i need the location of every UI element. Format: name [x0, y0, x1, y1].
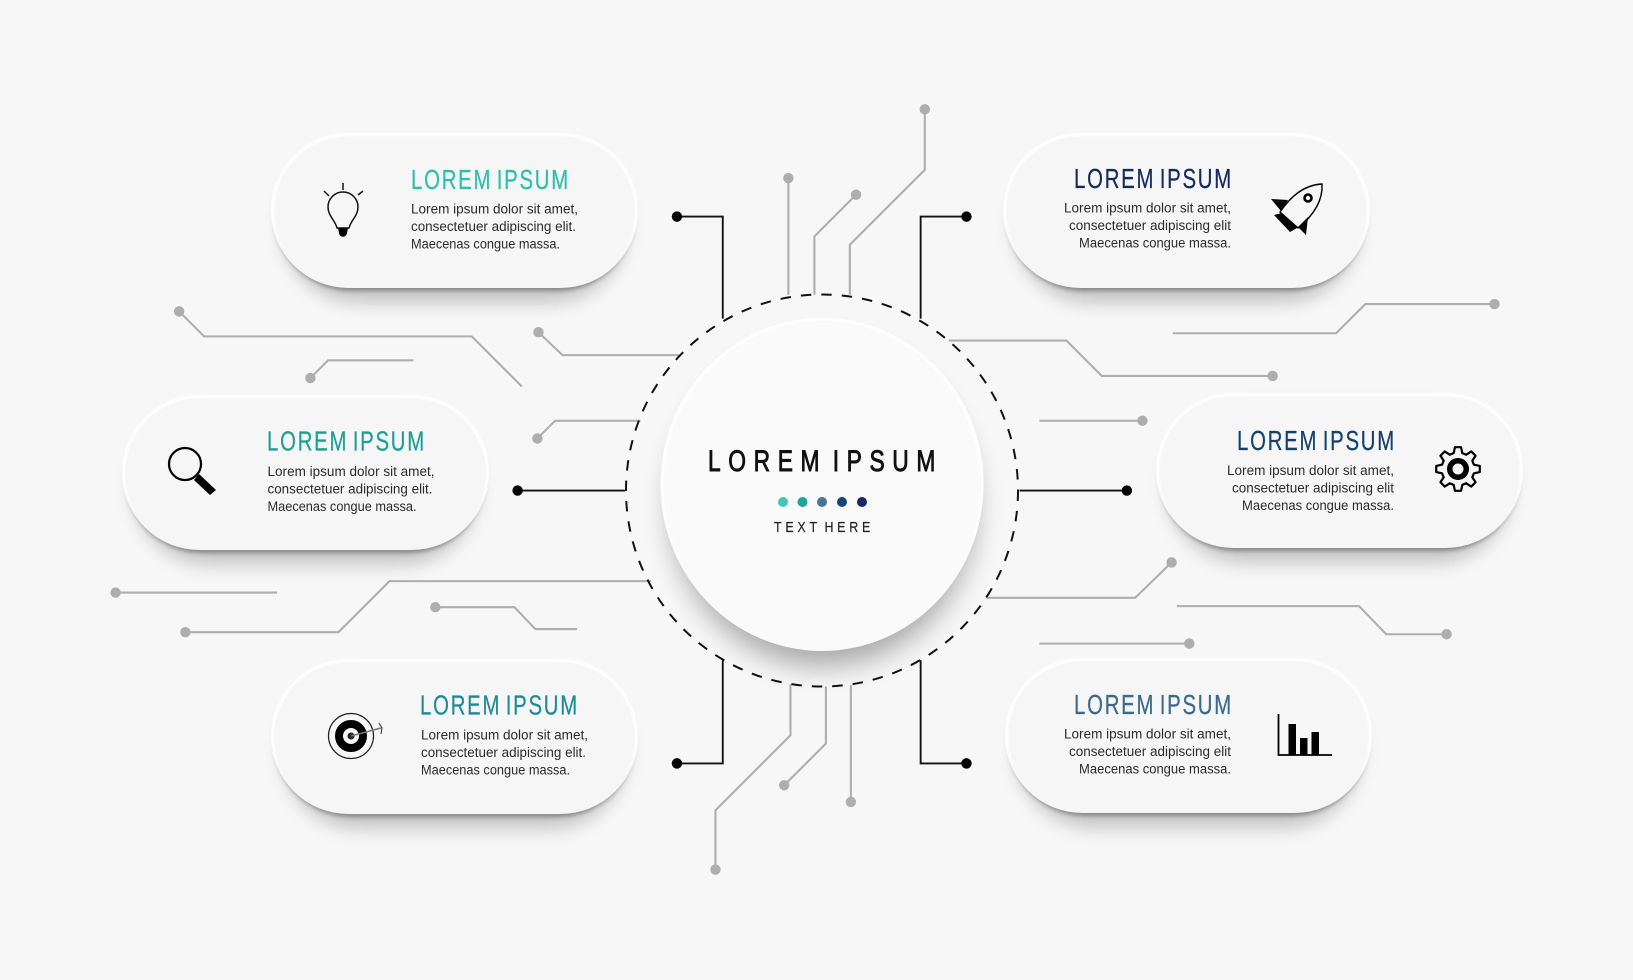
body text: Maecenas congue massa.: [1242, 498, 1394, 513]
body text: consectetuer adipiscing elit: [1069, 744, 1231, 759]
body text: Lorem ipsum dolor sit amet,: [1064, 200, 1231, 216]
body text: Lorem ipsum dolor sit amet,: [1227, 463, 1394, 478]
panel: middle left: [122, 395, 489, 565]
body text: consectetuer adipiscing elit: [1069, 218, 1231, 233]
dashed ring: [626, 294, 1018, 686]
body text: Maecenas congue massa.: [421, 762, 570, 778]
body text: Maecenas congue massa.: [1079, 236, 1231, 250]
body text: [1064, 726, 1231, 776]
body text: [268, 464, 434, 514]
icon: magnifying glass: [169, 448, 216, 495]
body text: Lorem ipsum dolor sit amet,: [421, 728, 588, 742]
body text: consectetuer adipiscing elit: [1232, 480, 1394, 496]
body text: [1227, 463, 1394, 513]
icon: gear: [1436, 447, 1480, 491]
body text: consectetuer adipiscing elit.: [268, 482, 432, 496]
central heading: LOREM IPSUM: [708, 445, 943, 478]
heading: LOREM IPSUM: [411, 164, 570, 195]
body text: consectetuer adipiscing elit.: [421, 745, 586, 760]
central subheading: TEXT HERE: [774, 519, 874, 536]
icon: target: [328, 714, 382, 758]
body text: Lorem ipsum dolor sit amet,: [1064, 726, 1231, 742]
body text: Maecenas congue massa.: [1079, 762, 1231, 776]
body text: [421, 728, 588, 778]
panel: bottom right: [1005, 658, 1372, 828]
black connector lines: [512, 211, 1132, 769]
heading: LOREM IPSUM: [1237, 425, 1396, 456]
body text: Lorem ipsum dolor sit amet,: [411, 202, 578, 216]
body text: consectetuer adipiscing elit.: [411, 219, 576, 234]
body text: Maecenas congue massa.: [268, 499, 416, 514]
heading: LOREM IPSUM: [420, 690, 579, 720]
gray circuit lines: [110, 104, 1500, 875]
heading: LOREM IPSUM: [267, 426, 426, 456]
heading: LOREM IPSUM: [1074, 689, 1233, 720]
body text: Maecenas congue massa.: [411, 236, 560, 252]
icon: bar chart: [1278, 714, 1332, 755]
central circle: [660, 318, 984, 666]
icon: rocket: [1271, 184, 1322, 235]
body text: [411, 202, 578, 252]
body text: Lorem ipsum dolor sit amet,: [268, 464, 434, 479]
panel: bottom left: [271, 659, 638, 829]
body text: [1064, 200, 1231, 250]
heading: LOREM IPSUM: [1074, 163, 1233, 194]
panel: top right: [1003, 133, 1370, 303]
panel: top left: [271, 133, 638, 303]
icon: light bulb: [324, 183, 363, 236]
colour dots: [778, 497, 867, 507]
panel: middle right: [1156, 393, 1523, 563]
